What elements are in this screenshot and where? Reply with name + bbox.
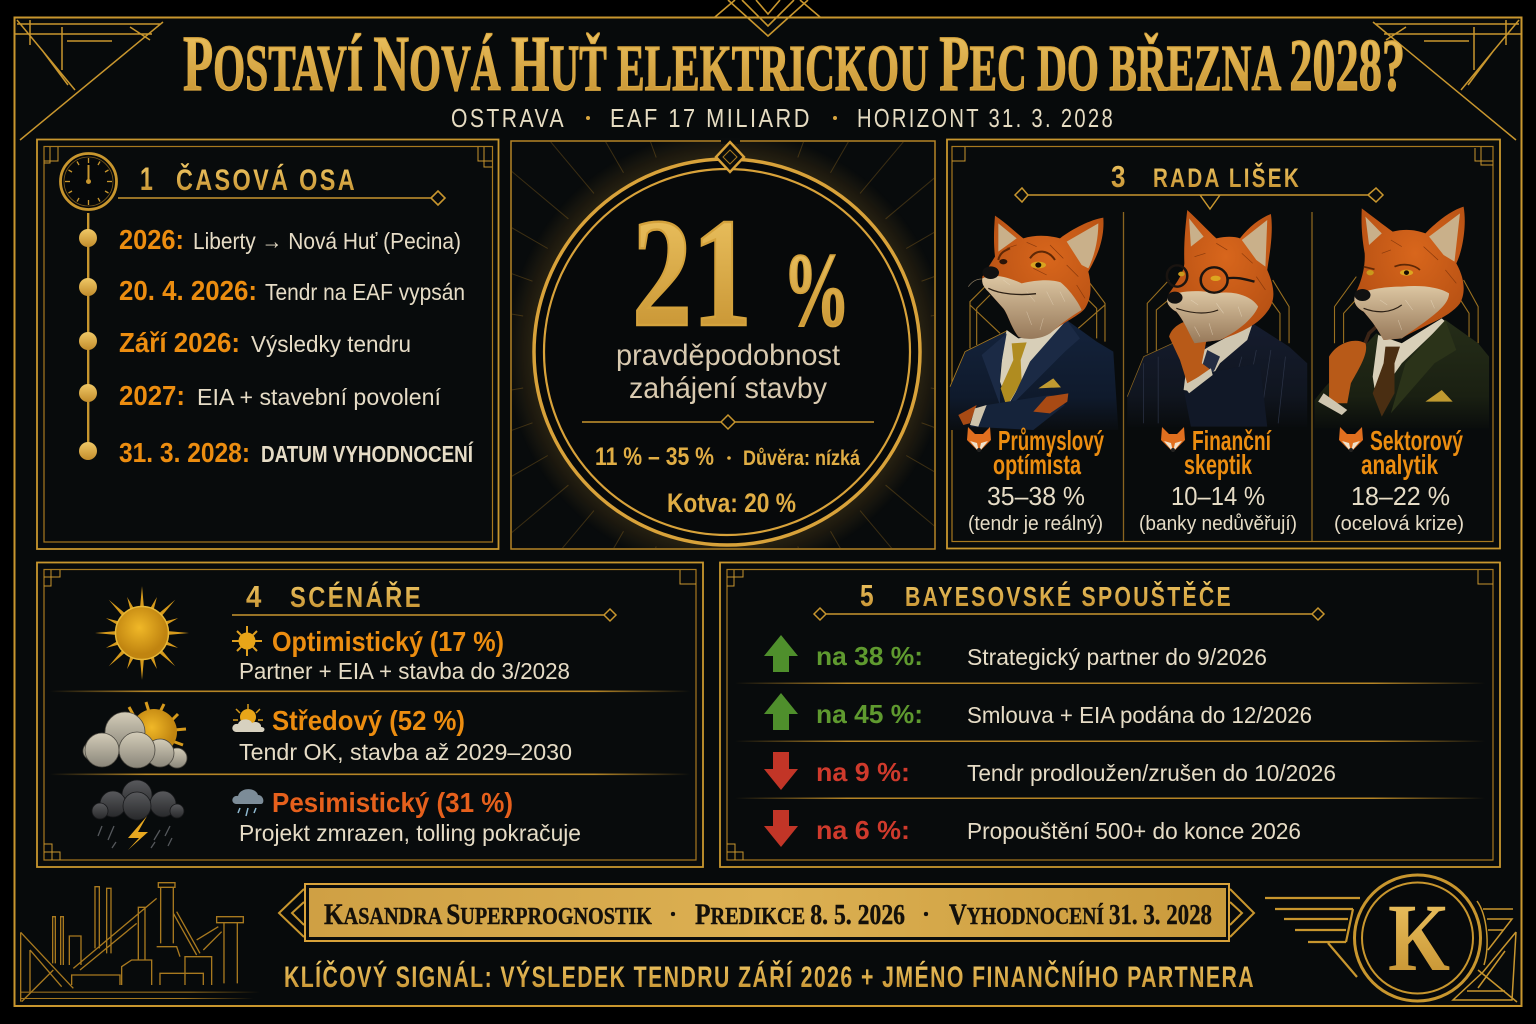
interval and confidence [595,443,860,471]
subtitle: OSTRAVA [451,103,566,133]
probability caption: zahájení stavby [629,372,827,405]
corner ornament top right [1373,20,1521,140]
row: down to 9 %: na 9 %: [816,757,910,787]
icon: large sun [95,586,189,680]
label: financial sceptic: skeptik [1184,449,1252,480]
heading [246,579,423,614]
label: industrial optimist: 35–38 % [987,481,1085,511]
emblem: K seal with wings: K [1388,884,1450,991]
row: optimistic: Optimistický (17 %) [272,626,504,657]
timeline row 2026: 2026: [119,224,184,255]
row: pessimistic [232,787,581,846]
icon: small rain cloud [232,789,263,816]
icon: storm cloud [92,780,184,850]
heading: 4 [246,579,264,614]
heading: SCÉNÁŘE [290,580,423,614]
interval and confidence: Důvěra: nízká [743,447,860,470]
label: financial sceptic: Finanční [1192,425,1272,456]
icon: arrow down [764,752,798,790]
heading: BAYESOVSKÉ SPOUŠTĚČE [905,580,1233,612]
subtitle [451,103,1115,133]
row: down to 9 % [764,752,1336,790]
icon: steelworks skyline [20,883,260,1002]
icon: fox emoji [1339,427,1363,452]
icon: arrow down [764,810,798,847]
rays [512,142,934,548]
row: up to 45 % [764,693,1312,730]
panel 4: scenarios [37,562,703,867]
heading: 1 [140,161,155,197]
timeline row 2026 [119,224,461,255]
row: middle: Středový (52 %) [272,705,465,736]
row: middle: Tendr OK, stavba až 2029–2030 [239,739,572,765]
row: up to 38 %: na 38 %: [816,641,923,671]
icon: fox emoji [1161,427,1185,452]
row: optimistic [232,626,570,684]
heading [1111,159,1301,194]
timeline row září 2026 [119,327,411,358]
heading: ČASOVÁ OSA [176,163,357,197]
label: industrial optimist: (tendr je reálný) [968,513,1103,535]
big number: 21 [632,186,752,359]
label: sector analyst: Sektorový [1370,425,1463,456]
label: financial sceptic: 10–14 % [1171,481,1265,511]
fox: industrial optimist [950,216,1118,430]
timeline row 31. 3. 2028: 31. 3. 2028: [119,437,250,468]
subtitle: HORIZONT 31. 3. 2028 [857,103,1115,133]
emblem: K seal with wings [1265,875,1517,1002]
timeline row 2027 [119,380,442,411]
label: industrial optimist: Průmyslový [998,425,1104,456]
timeline row 31. 3. 2028: DATUM VYHODNOCENÍ [261,440,473,467]
heading [860,578,1233,613]
icon: clock [60,154,116,210]
timeline row 20. 4. 2026: 20. 4. 2026: [119,275,257,306]
label: industrial optimist [967,425,1104,535]
timeline row 2026: Liberty → Nová Huť (Pecina) [193,228,461,254]
anchor: Kotva: 20 % [667,488,796,518]
row: up to 45 %: Smlouva + EIA podána do 12/2026 [967,702,1312,728]
icon: small sun cloud [232,704,264,732]
panel 1: timeline [37,140,498,549]
interval and confidence: 11 % – 35 % [595,443,714,471]
fox: financial sceptic [1127,210,1307,427]
row: middle [232,704,572,765]
timeline row 31. 3. 2028 [119,437,473,468]
row: down to 9 %: Tendr prodloužen/zrušen do 10/2026 [967,760,1336,786]
label: sector analyst: analytik [1361,449,1438,480]
heading: 5 [860,578,876,613]
big number: % [783,231,850,348]
row: pessimistic: Projekt zmrazen, tolling pokračuje [239,820,581,846]
row: up to 38 % [764,635,1267,672]
top centre ornament [715,0,820,36]
banner: author and dates: PREDIKCE 8. 5. 2026 [695,898,905,931]
icon: fox emoji [967,427,991,452]
label: sector analyst: 18–22 % [1351,481,1450,511]
label: financial sceptic [1139,425,1297,535]
probability caption [616,339,841,405]
label: industrial optimist: optímista [993,449,1081,480]
timeline row 20. 4. 2026: Tendr na EAF vypsán [265,279,465,305]
subtitle: EAF 17 MILIARD [610,103,812,133]
panel 5: Bayesian triggers [720,562,1500,867]
title: POSTAVÍ NOVÁ HUŤ ELEKTRICKOU PEC DO BŘEZNA 2028? [183,21,1405,108]
banner: author and dates: KASANDRA SUPERPROGNOSTIK [324,898,652,931]
row: pessimistic: Pesimistický (31 %) [272,787,513,818]
icon: arrow up [764,635,798,672]
fox: sector analyst [1315,207,1489,428]
row: down to 6 %: Propouštění 500+ do konce 2026 [967,818,1301,844]
timeline row 20. 4. 2026 [119,275,465,306]
icon: arrow up [764,693,798,730]
timeline row 2027: 2027: [119,380,185,411]
banner: author and dates [279,884,1254,941]
row: up to 38 %: Strategický partner do 9/2026 [967,644,1267,670]
panel 2: main probability [321,0,1133,739]
gold ring [512,140,934,548]
banner: author and dates: VYHODNOCENÍ 31. 3. 2028 [949,898,1212,931]
label: sector analyst [1334,425,1464,535]
heading: 3 [1111,159,1128,194]
timeline row září 2026: Výsledky tendru [251,331,411,357]
row: up to 45 %: na 45 %: [816,699,923,729]
icon: cloud with sun [83,702,187,768]
row: down to 6 %: na 6 %: [816,815,910,845]
heading [140,161,357,197]
panel 3: fox council [947,140,1500,548]
probability caption: pravděpodobnost [616,339,841,372]
row: down to 6 % [764,810,1301,847]
row: optimistic: Partner + EIA + stavba do 3/2028 [239,658,570,684]
heading: RADA LIŠEK [1153,162,1301,193]
timeline row září 2026: Září 2026: [119,327,240,358]
label: financial sceptic: (banky nedůvěřují) [1139,513,1297,535]
timeline axis [79,213,97,460]
label: sector analyst: (ocelová krize) [1334,513,1464,535]
corner ornament top left [15,20,163,140]
icon: small sun [232,626,262,656]
timeline row 2027: EIA + stavební povolení [197,384,442,410]
